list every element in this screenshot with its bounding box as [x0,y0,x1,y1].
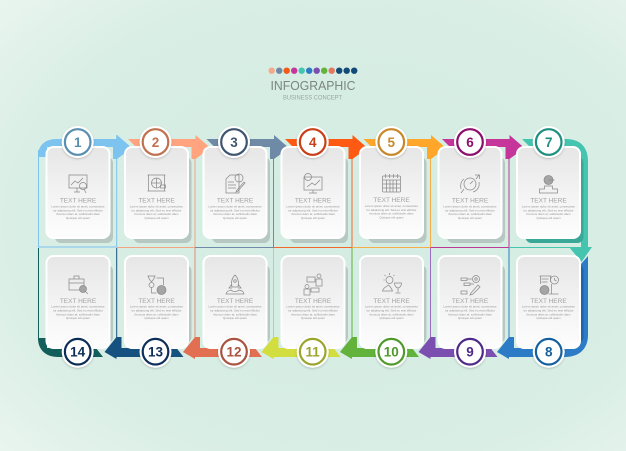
step 4 body text: tur adipiscing elit. Sed eu erat efficitur [288,208,338,212]
step 2 body text: Quisque elit quam [144,216,169,220]
step 3 body text: Lorem ipsum dolor sit amet, consectetur [208,204,262,208]
step 5 body text: Quisque elit quam [379,215,404,219]
step 9 heading: TEXT HERE [452,298,489,305]
step 2 body text: Lorem ipsum dolor sit amet, consectetur [130,204,183,208]
step 14 body text: Lorem ipsum dolor sit amet, consectetur [51,305,105,309]
icon: target on podium [540,176,558,193]
step 12 heading: TEXT HERE [217,298,254,305]
panel: step 3 [204,126,270,243]
step 10 badge: 10 [384,344,399,360]
step 4 body text: rhoncus diam at, sollicitudin diam [291,212,336,216]
step 1 body text: rhoncus diam at, sollicitudin diam [56,212,101,216]
connector grid lines [38,135,582,340]
step 3 badge: 3 [230,135,238,150]
panel: step 11 [282,256,348,368]
step 9 body text: tur adipiscing elit. Sed eu erat efficitur [445,308,495,312]
step 8 body text: Quisque elit quam [536,316,561,320]
step 12 body text: Lorem ipsum dolor sit amet, consectetur [208,305,262,309]
arrow 14 [38,338,103,357]
heading: INFOGRAPHIC [270,78,356,93]
step 6 body text: Lorem ipsum dolor sit amet, consectetur [443,204,497,208]
step 3 heading: TEXT HERE [217,198,254,204]
step 13 badge: 13 [148,344,163,360]
arrow 5 [364,135,446,159]
step 4 body text: Lorem ipsum dolor sit amet, consectetur [286,204,340,208]
step 11 body text: tur adipiscing elit. Sed eu erat efficitur [288,308,338,312]
step 1 body text [51,204,105,220]
step 4 badge: 4 [309,135,317,150]
panel: step 2 [125,126,192,243]
step 10 body text: tur adipiscing elit. Sed eu erat efficitur [367,308,416,312]
panel: step 4 [282,126,348,243]
title block [268,68,357,102]
panel: step 14 [46,256,113,368]
step 3 body text [208,204,262,220]
step 14 heading: TEXT HERE [60,298,97,305]
icon: board, clock and pie chart [540,276,558,294]
step 5 body text: rhoncus diam at, sollicitudin diam [369,212,414,216]
step 9 body text: Lorem ipsum dolor sit amet, consectetur [443,305,497,309]
arrow 7 [522,139,592,262]
step 7 body text: tur adipiscing elit. Sed eu erat efficitur [524,208,573,212]
icon: gear, flow and pencil [461,276,480,295]
step 6 body text [443,204,497,220]
step 5 body text: Lorem ipsum dolor sit amet, consectetur [365,204,418,208]
step 6 body text: Quisque elit quam [458,216,483,220]
icon: stopwatch with arrows [461,175,480,193]
arrow 10 [340,337,419,359]
step 1 badge: 1 [74,135,82,150]
icon: document with pencil [226,174,245,193]
step 13 body text: Lorem ipsum dolor sit amet, consectetur [130,305,183,309]
step 11 heading: TEXT HERE [295,298,332,305]
step 2 heading: TEXT HERE [138,198,175,204]
panel: step 13 [125,256,192,368]
step 2 badge: 2 [152,135,159,150]
step 8 body text: rhoncus diam at, sollicitudin diam [526,312,571,316]
step 7 body text: rhoncus diam at, sollicitudin diam [526,212,571,216]
step 1 body text: Lorem ipsum dolor sit amet, consectetur [51,204,105,208]
step 8 body text: tur adipiscing elit. Sed eu erat efficitur [524,308,573,312]
step 13 body text: rhoncus diam at, sollicitudin diam [134,312,179,316]
step 3 body text: Quisque elit quam [223,216,248,220]
arrow 8 [497,256,588,359]
step 7 badge: 7 [545,135,552,150]
step 13 heading: TEXT HERE [138,298,175,305]
step 1 body text: tur adipiscing elit. Sed eu erat efficitur [53,208,103,212]
step 8 badge: 8 [545,344,553,360]
step 3 body text: tur adipiscing elit. Sed eu erat efficitur [210,208,260,212]
step 13 body text: Quisque elit quam [144,316,169,320]
panel: step 8 [517,256,584,368]
step 10 body text: Quisque elit quam [379,316,404,320]
step 10 body text: Lorem ipsum dolor sit amet, consectetur [365,305,418,309]
step 4 body text: Quisque elit quam [301,216,326,220]
icon: presentation chart with magnifier [69,175,87,193]
step 11 body text: Lorem ipsum dolor sit amet, consectetur [286,305,340,309]
panel: step 6 [438,126,505,243]
step 10 body text: rhoncus diam at, sollicitudin diam [369,312,414,316]
step 6 body text: tur adipiscing elit. Sed eu erat efficitur [445,208,495,212]
step 5 heading: TEXT HERE [373,197,410,204]
step 7 body text [522,204,575,220]
arrow 6 [442,135,524,159]
step 3 body text: rhoncus diam at, sollicitudin diam [213,212,258,216]
icon: monitor with chart and clock [304,174,322,193]
step 2 body text: tur adipiscing elit. Sed eu erat efficitur [132,208,181,212]
arrow 13 [104,337,184,359]
arrow 4 [285,135,368,159]
panel: step 1 [46,126,113,243]
step 14 body text: tur adipiscing elit. Sed eu erat efficitur [53,308,103,312]
step 9 badge: 9 [466,344,474,360]
panel: step 12 [204,256,270,368]
step 2 body text: rhoncus diam at, sollicitudin diam [134,212,179,216]
step 9 body text [443,305,497,320]
arrow 3 [206,135,289,159]
arrow 12 [183,337,262,359]
subheading: BUSINESS CONCEPT [283,94,342,102]
step 6 heading: TEXT HERE [452,198,489,204]
step 1 body text: Quisque elit quam [66,216,91,220]
step 8 body text [522,305,575,320]
step 14 body text: Quisque elit quam [66,316,91,320]
arrow 1 [38,135,132,159]
step 13 body text: tur adipiscing elit. Sed eu erat efficitur [132,308,181,312]
arrow 9 [418,337,498,359]
icon: rocket launch [226,275,244,294]
icon: idea bulb and trophy [382,273,402,293]
step 8 heading: TEXT HERE [530,298,567,305]
step 12 body text: tur adipiscing elit. Sed eu erat efficitur [210,308,260,312]
step 11 body text: rhoncus diam at, sollicitudin diam [291,312,336,316]
step 10 body text [365,305,418,320]
step 12 body text [208,305,262,320]
step 9 body text: Quisque elit quam [458,316,483,320]
step 12 body text: Quisque elit quam [223,316,248,320]
step 11 body text: Quisque elit quam [301,316,326,320]
step 1 heading: TEXT HERE [60,198,97,204]
step 11 badge: 11 [306,344,320,360]
step 10 heading: TEXT HERE [373,298,410,305]
icon: projector board with pie chart [148,175,166,191]
step 12 badge: 12 [226,344,242,360]
step 6 body text: rhoncus diam at, sollicitudin diam [448,212,493,216]
step 5 body text: tur adipiscing elit. Sed eu erat efficitur [367,208,416,212]
arrow 2 [128,135,210,159]
step 5 body text [365,204,418,219]
step 14 badge: 14 [70,344,86,360]
step 4 heading: TEXT HERE [295,198,332,204]
step 12 body text: rhoncus diam at, sollicitudin diam [213,312,258,316]
step 13 body text [130,305,183,320]
step 8 body text: Lorem ipsum dolor sit amet, consectetur [522,305,575,309]
step 2 body text [130,204,183,220]
step 4 body text [286,204,340,220]
panel: step 5 [360,126,426,243]
step 11 body text [286,305,340,320]
colour dots [268,68,357,74]
icon: briefcase with magnifier [69,276,88,294]
icon: calendar [382,174,400,192]
icon: trophy and target [148,276,166,294]
panel: step 9 [438,256,505,368]
step 14 body text [51,305,105,320]
panel: step 10 [360,256,426,368]
step 7 body text: Quisque elit quam [536,216,561,220]
arrow 11 [262,337,340,359]
step 5 badge: 5 [388,135,396,150]
icon: people with speech boxes [304,274,322,295]
step 9 body text: rhoncus diam at, sollicitudin diam [448,312,493,316]
panel: step 7 [517,126,584,243]
step 7 body text: Lorem ipsum dolor sit amet, consectetur [522,204,575,208]
step 14 body text: rhoncus diam at, sollicitudin diam [56,312,101,316]
step 6 badge: 6 [466,135,474,150]
step 7 heading: TEXT HERE [530,198,567,204]
